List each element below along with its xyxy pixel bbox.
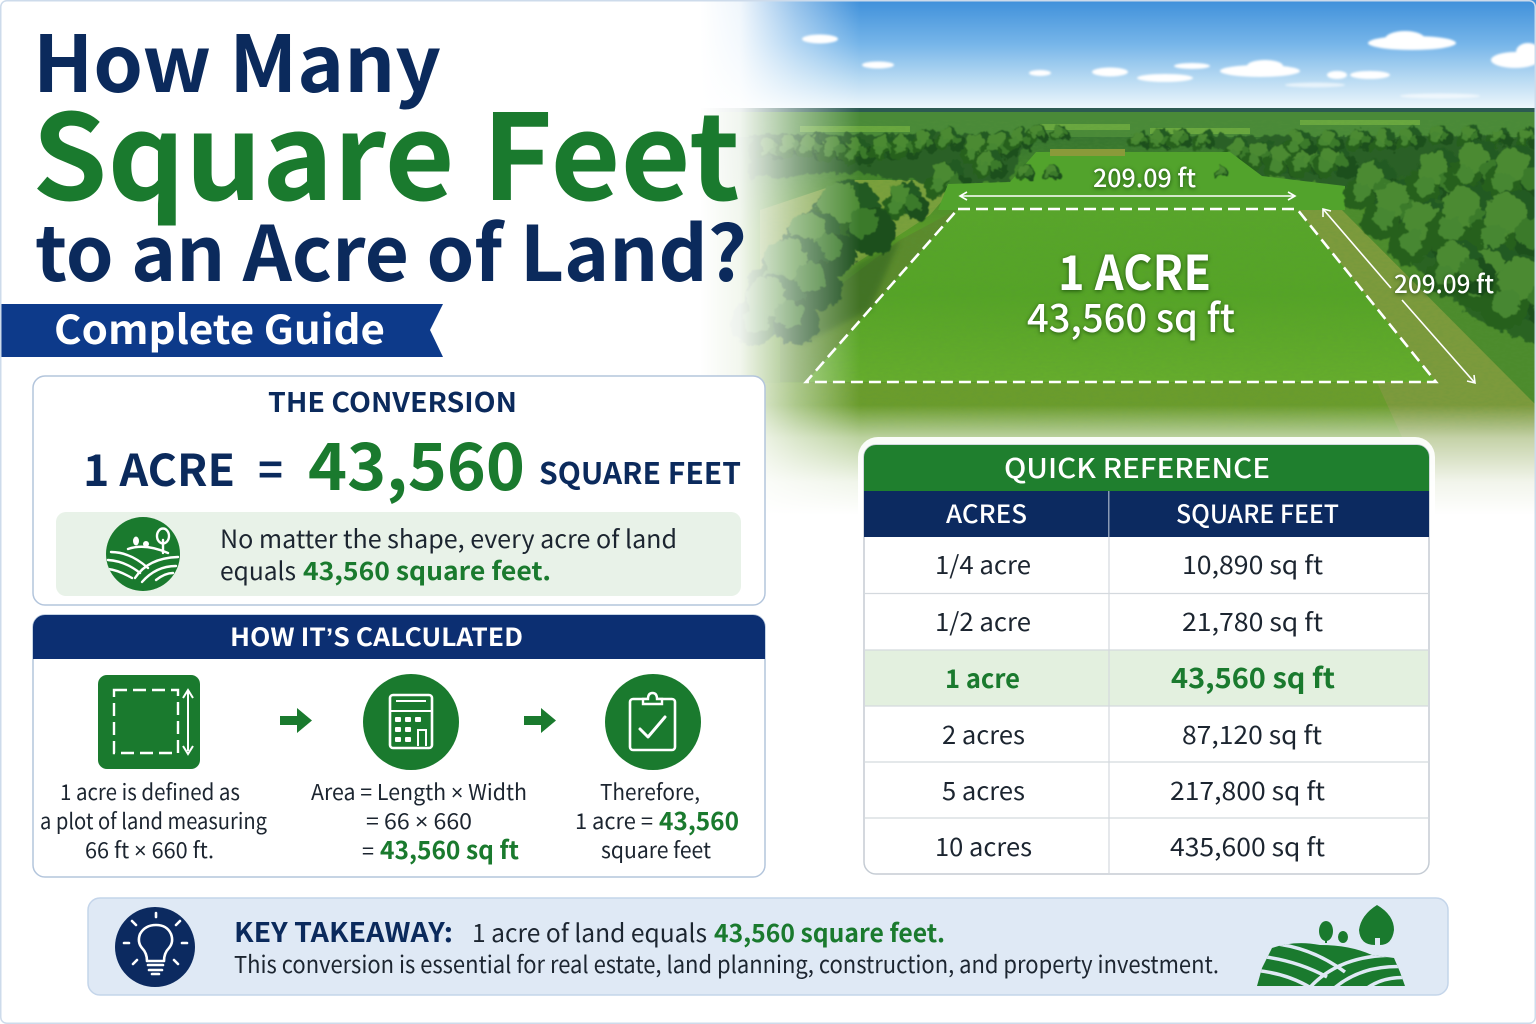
step 1 text — [40, 775, 268, 865]
back tree line — [750, 124, 1536, 220]
conversion equation: = — [258, 435, 283, 499]
table column headers — [864, 491, 1429, 537]
arrow 1 — [280, 708, 312, 733]
step 1 text: 66 ft × 660 ft. — [85, 833, 214, 865]
note text: equals — [220, 552, 296, 588]
icon: farm with trees — [1257, 905, 1405, 986]
fades into white — [700, 0, 860, 525]
photo: plot boundary dashed — [806, 209, 1436, 382]
photo: top dimension label: 209.09 ft — [1093, 159, 1196, 195]
row: 1/2 acre — [935, 603, 1324, 639]
highlighted row background — [865, 650, 1428, 706]
row: 1/2 acre: 21,780 sq ft — [1182, 603, 1324, 639]
panel: key takeaway — [88, 898, 1448, 995]
panel: the conversion — [33, 376, 765, 605]
right strip of mown grass — [1297, 208, 1536, 520]
step 3 text: square feet — [601, 833, 711, 865]
arrow 2 — [524, 708, 556, 733]
central meadow — [938, 152, 1345, 210]
step 2 text — [311, 775, 527, 867]
row: 10 acres: 10 acres — [935, 828, 1032, 864]
conversion equation: 43,560 — [308, 415, 525, 509]
panel: how it's calculated — [33, 615, 765, 877]
title: to an Acre of Land? — [35, 193, 747, 303]
step 3 text — [575, 775, 739, 865]
icon: farm fields — [106, 517, 180, 591]
icon: clipboard check — [605, 674, 701, 770]
table title bar — [864, 445, 1429, 491]
aerial photo of field — [700, 0, 1536, 525]
tree shadow band — [790, 240, 900, 345]
step 2 text: 43,560 sq ft — [380, 831, 519, 867]
far horizon band — [700, 108, 1536, 112]
grass texture — [760, 120, 1536, 430]
note text: 43,560 square feet. — [303, 552, 551, 588]
calculated header bar: HOW IT’S CALCULATED — [230, 618, 523, 654]
note text: No matter the shape, every acre of land — [220, 520, 677, 556]
banner: complete guide: Complete Guide — [54, 298, 385, 356]
right forest — [1343, 140, 1536, 345]
row: 1/4 acre — [935, 546, 1324, 582]
row: 5 acres — [942, 772, 1326, 808]
takeaway text: This conversion is essential for real estate, land planning, construction, and property investment. — [234, 946, 1219, 980]
row: 1/4 acre: 1/4 acre — [935, 546, 1031, 582]
title: Square Feet — [32, 63, 740, 235]
row: 1 acre: 43,560 sq ft — [1171, 657, 1335, 697]
row: 1 acre — [945, 657, 1335, 697]
row: 2 acres: 87,120 sq ft — [1182, 716, 1323, 752]
plot — [806, 209, 1436, 382]
photo: right dimension label: 209.09 ft — [1394, 265, 1494, 301]
conversion equation: 1 ACRE — [83, 435, 235, 499]
step 2 text: = — [362, 834, 374, 866]
row: 2 acres — [942, 716, 1323, 752]
calculated header bar — [33, 615, 765, 659]
photo: top dimension arrow — [960, 192, 1295, 200]
row: 10 acres: 435,600 sq ft — [1170, 828, 1326, 864]
icon: measured plot — [98, 675, 200, 769]
icon: calculator — [363, 674, 459, 770]
table column headers: SQUARE FEET — [1176, 495, 1339, 531]
conversion equation — [83, 415, 741, 509]
step 2 text: Area = Length × Width — [311, 775, 527, 807]
conversion note box — [56, 512, 741, 596]
step 3 text: 1 acre = — [575, 804, 653, 836]
clouds — [802, 31, 1536, 98]
step 2 text: = 66 × 660 — [366, 804, 472, 836]
row: 5 acres: 5 acres — [942, 772, 1025, 808]
photo: square feet label: 43,560 sq ft — [1027, 288, 1235, 344]
left lower verge — [780, 209, 958, 382]
row: 5 acres: 217,800 sq ft — [1170, 772, 1326, 808]
row: 2 acres: 2 acres — [942, 716, 1025, 752]
panel: quick reference table — [858, 437, 1435, 880]
row: 1/2 acre: 1/2 acre — [935, 603, 1031, 639]
ground — [700, 108, 1536, 520]
takeaway text — [234, 911, 1219, 980]
row: 10 acres — [935, 828, 1326, 864]
table title bar: QUICK REFERENCE — [1004, 447, 1270, 486]
title: How Many — [33, 3, 441, 115]
banner: complete guide — [0, 298, 443, 357]
takeaway text: 43,560 square feet. — [714, 914, 945, 950]
photo: right dimension arrow — [1323, 209, 1475, 383]
row: 1/4 acre: 10,890 sq ft — [1182, 546, 1324, 582]
icon: light bulb — [115, 907, 195, 987]
step 3 text: 43,560 — [659, 802, 739, 838]
title — [32, 3, 747, 303]
note text — [220, 520, 677, 588]
conversion equation: SQUARE FEET — [539, 449, 741, 493]
step 1 text: a plot of land measuring — [40, 804, 268, 836]
row: 1 acre: 1 acre — [945, 659, 1020, 696]
left foreground trees — [730, 180, 896, 345]
table column headers: ACRES — [946, 495, 1027, 531]
small meadow trees — [1015, 165, 1230, 180]
step 1 text: 1 acre is defined as — [60, 775, 240, 807]
conversion heading: THE CONVERSION — [268, 381, 517, 420]
takeaway text: KEY TAKEAWAY: — [234, 911, 453, 950]
takeaway text: 1 acre of land equals — [472, 914, 707, 950]
step 3 text: Therefore, — [600, 775, 700, 807]
photo: 1 acre label: 1 ACRE — [1058, 234, 1211, 304]
